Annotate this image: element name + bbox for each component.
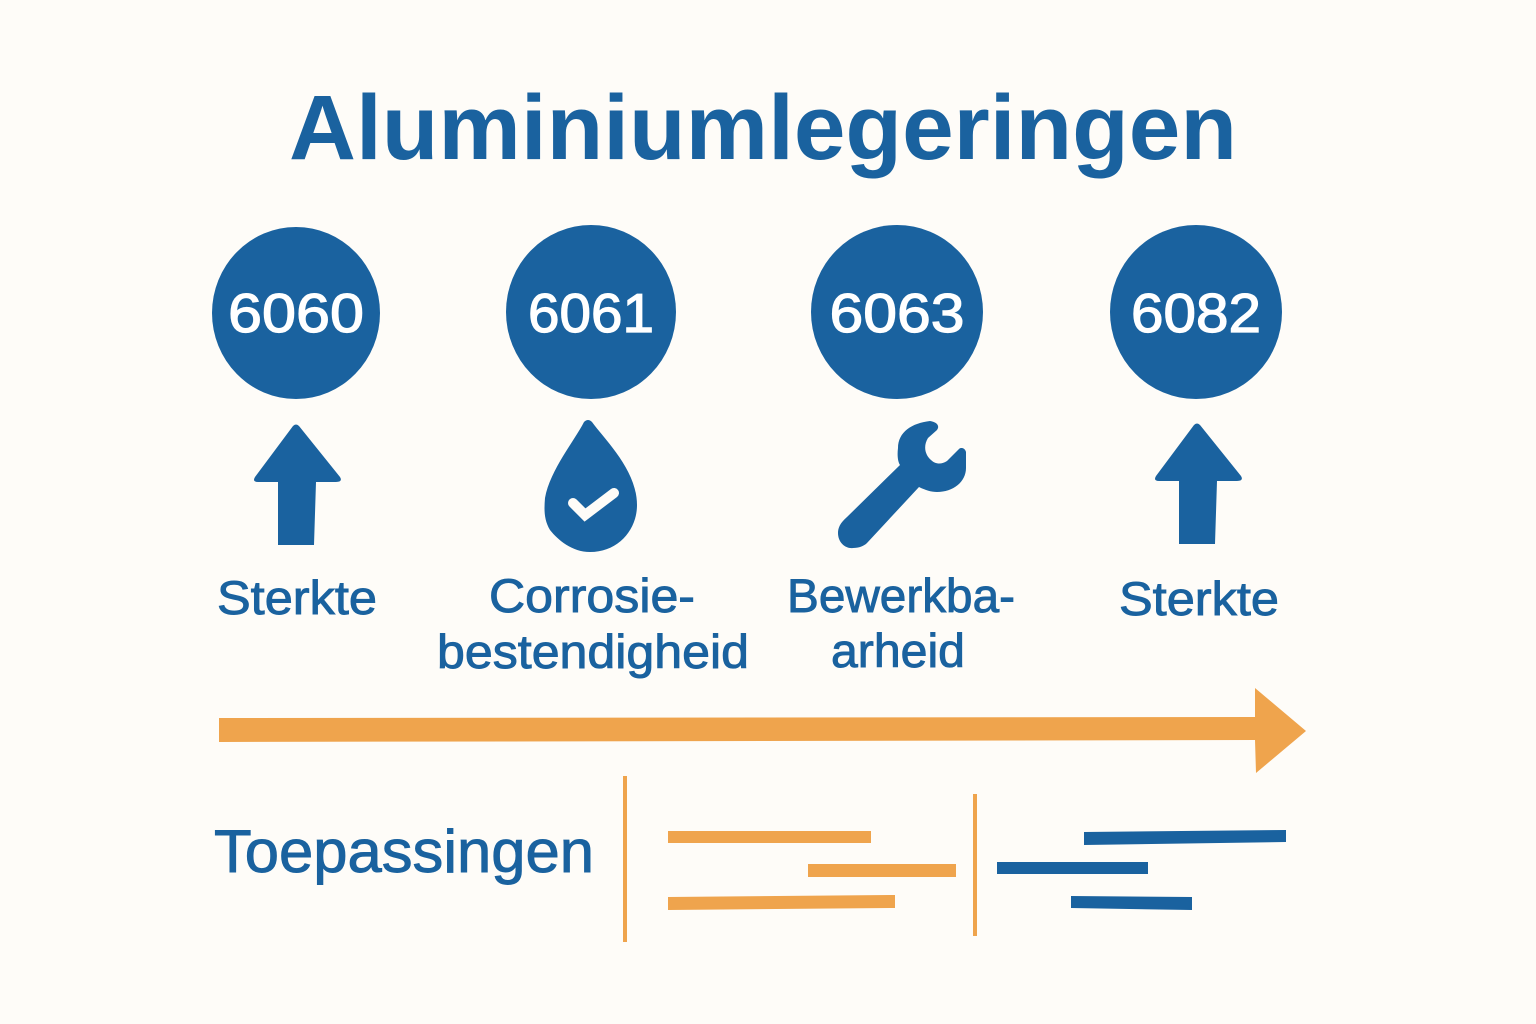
circle: 6060 [212,227,380,399]
circle: 6061 [506,225,676,399]
circle: 6082: 6082 [1131,282,1261,344]
icon: water drop with check [545,420,637,552]
title: Aluminiumlegeringen [289,77,1237,179]
label: Corrosiebestendigheid [437,569,749,678]
icon: arrow up 6082 [1155,424,1242,544]
label: Bewerkbaarheid [787,569,1015,677]
label: Corrosiebestendigheid: bestendigheid [437,625,749,678]
label: Sterkte 2: Sterkte [1119,572,1279,625]
heading: Toepassingen: Toepassingen [214,818,594,885]
label: Bewerkbaarheid: Bewerkba- [787,569,1015,622]
icon: wrench [838,421,966,548]
label: Sterkte 1: Sterkte [217,571,377,624]
orange bars group [623,776,977,942]
label: Corrosiebestendigheid: Corrosie- [489,569,695,622]
circle: 6063 [811,225,983,399]
circle: 6082 [1110,225,1282,399]
orange timeline arrow [219,688,1306,773]
blue bars group [997,830,1286,910]
circle: 6063: 6063 [830,282,964,344]
circle: 6060: 6060 [228,282,364,344]
label: Bewerkbaarheid: arheid [831,624,965,677]
icon: arrow up 6060 [254,424,341,545]
circle: 6061: 6061 [528,282,654,344]
